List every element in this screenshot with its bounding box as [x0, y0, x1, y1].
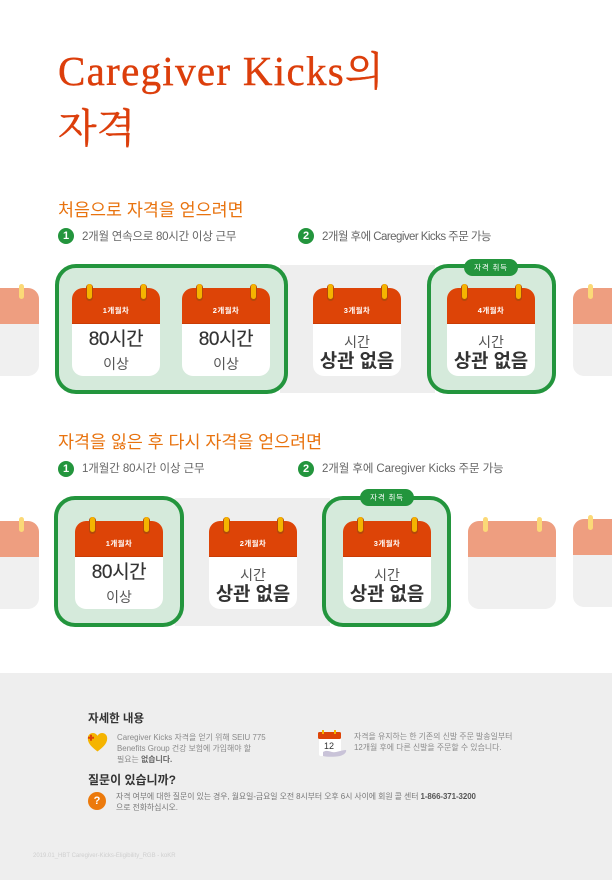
step 1: first eligibility [58, 228, 236, 244]
faded calendar right [573, 288, 612, 376]
icon: calendar with shoe [318, 730, 346, 757]
calendar: month 1: 1개월차 [106, 539, 132, 548]
calendar: month 2: 상관 없음 [216, 583, 290, 604]
badge: eligibility earned: 자격 취득 [474, 263, 508, 272]
calendar: month 4: 4개월차 [478, 306, 504, 315]
calendar: month 3: 3개월차 [374, 539, 400, 548]
faded calendar left [0, 521, 39, 609]
green highlight: month 1 [54, 496, 184, 627]
step 2: regaining eligibility [298, 461, 504, 477]
text: health plan note: Caregiver Kicks 자격을 얻기 위해 SEIU 775 [117, 733, 266, 742]
badge: eligibility earned: 자격 취득 [370, 493, 404, 502]
calendar: month 1: 80시간 [89, 329, 143, 350]
grey band [280, 265, 435, 393]
icon: heart with plus [88, 733, 108, 752]
calendar: month 4 [447, 288, 535, 376]
calendar: month 2: 이상 [213, 356, 239, 372]
title [58, 48, 384, 151]
calendar: month 2 [182, 288, 270, 376]
calendar: month 1: 이상 [106, 589, 132, 605]
text: health plan note [117, 733, 266, 764]
timeline: regaining eligibility [0, 489, 612, 627]
calendar: month 2: 80시간 [199, 329, 253, 350]
calendar: month 3: 시간 [374, 567, 400, 583]
calendar: month 1 [75, 521, 163, 609]
step 1: regaining eligibility: 1개월간 80시간 이상 근무 [82, 463, 204, 475]
calendar: month 1: 이상 [103, 356, 129, 372]
icon: question mark [88, 792, 106, 810]
calendar: month 3 [343, 521, 431, 609]
step 1: first eligibility: 2개월 연속으로 80시간 이상 근무 [82, 231, 236, 243]
calendar: month 1: 80시간 [92, 562, 146, 583]
heading: first eligibility: 처음으로 자격을 얻으려면 [58, 200, 244, 220]
icon: calendar with shoe: 12 [324, 741, 334, 751]
icon: question mark: ? [94, 795, 100, 807]
calendar: month 3: 상관 없음 [320, 350, 394, 371]
calendar: month 2: 2개월차 [240, 539, 266, 548]
title: Caregiver Kicks의 [58, 48, 384, 94]
green highlight: month 4 [427, 264, 556, 394]
step 2: regaining eligibility: 2개월 후에 Caregiver Kicks 주문 가능 [322, 463, 504, 475]
calendar: month 1 [72, 288, 160, 376]
calendar: month 3: 상관 없음 [350, 583, 424, 604]
step 1: regaining eligibility [58, 461, 204, 477]
green highlight: month 3 [322, 496, 451, 627]
badge: eligibility earned [360, 489, 414, 506]
text: contact details: 자격 여부에 대한 질문이 있는 경우, 월요일-금요일 오전 8시부터 오후 6시 사이에 회원 콜 센터 1-866-371-3200 [116, 792, 476, 801]
calendar: month 4: 시간 [478, 334, 504, 350]
badge: eligibility earned [464, 259, 518, 276]
step 2: first eligibility: 2개월 후에 Caregiver Kicks 주문 가능 [322, 231, 491, 243]
calendar: month 3 [313, 288, 401, 376]
faded calendar right [573, 519, 612, 607]
heading: regaining eligibility: 자격을 잃은 후 다시 자격을 얻으려면 [58, 432, 322, 452]
text: contact details [116, 792, 476, 812]
step 2: regaining eligibility: 2 [303, 463, 309, 475]
heading: questions: 질문이 있습니까? [88, 773, 176, 787]
text: 12 month reorder note [354, 732, 512, 752]
calendar: month 1: 1개월차 [103, 306, 129, 315]
panel: footer information [0, 673, 612, 880]
faded calendar middle [468, 521, 556, 609]
title: 자격 [58, 106, 135, 151]
step 2: first eligibility: 2 [303, 230, 309, 242]
grey band [175, 498, 330, 626]
calendar: month 2 [209, 521, 297, 609]
faded calendar left [0, 288, 39, 376]
text: health plan note: 필요는 없습니다. [117, 755, 172, 764]
step 1: regaining eligibility: 1 [63, 463, 69, 475]
timeline: first eligibility [0, 259, 612, 394]
calendar: month 2: 2개월차 [213, 306, 239, 315]
calendar: month 3: 3개월차 [344, 306, 370, 315]
calendar: month 2: 시간 [240, 567, 266, 583]
green highlight: months 1-2 [55, 264, 288, 394]
calendar: month 4: 상관 없음 [454, 350, 528, 371]
step 2: first eligibility [298, 228, 491, 244]
calendar: month 3: 시간 [344, 334, 370, 350]
text: 12 month reorder note: 12개월 후에 다른 신발을 주문할 수 있습니다. [354, 742, 502, 752]
text: 12 month reorder note: 자격을 유지하는 한 기존의 신발 주문 발송일부터 [354, 732, 512, 741]
heading: more information: 자세한 내용 [88, 713, 144, 725]
text: health plan note: Benefits Group 건강 보험에 가입해야 할 [117, 744, 251, 753]
step 1: first eligibility: 1 [63, 230, 69, 242]
footer code: 2019.01_HBT Caregiver-Kicks-Eligibility_RGB - koKR [33, 853, 176, 859]
text: contact details: 으로 전화하십시오. [116, 802, 178, 812]
